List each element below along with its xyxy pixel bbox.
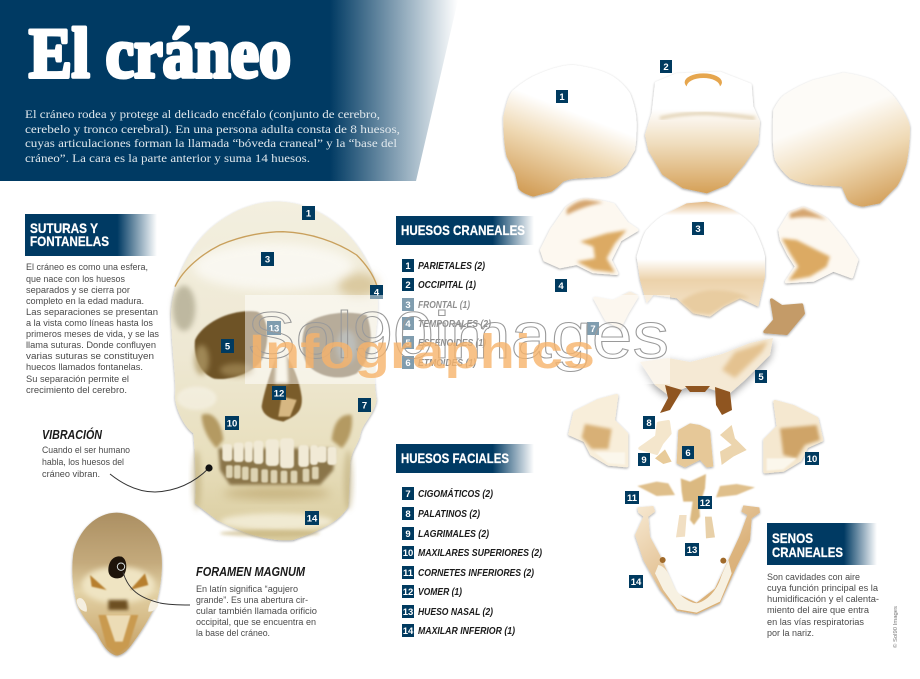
list craneales: TEMPORALES (2) (418, 319, 492, 330)
foramen magnum callout (123, 565, 317, 639)
list craneales: 3 (405, 300, 411, 311)
list faciales: PALATINOS (2) (418, 509, 481, 520)
header panel (0, 0, 458, 181)
vibración callout: habla, los huesos del (42, 457, 124, 468)
list faciales: LAGRIMALES (2) (418, 529, 490, 540)
suturas text: El cráneo es como una esfera, (26, 262, 148, 273)
foramen magnum callout: la base del cráneo. (196, 628, 270, 639)
number labels on bones: 2 (663, 62, 669, 73)
list craneales: FRONTAL (1) (418, 300, 471, 311)
list faciales: 9 (405, 529, 411, 540)
number labels on bones: 9 (641, 455, 647, 466)
number labels on bones (221, 60, 819, 588)
number labels on bones: 5 (758, 372, 764, 383)
intro text: cerebelo y tronco cerebral). En una persona adulta consta de 8 huesos, (25, 124, 400, 136)
number labels on bones: 13 (269, 324, 279, 334)
bone: lacrimal (640, 422, 672, 464)
intro text: El cráneo rodea y protege al delicado encéfalo (conjunto de cerebro, (25, 109, 380, 121)
senos text: humidificación y el calenta- (767, 594, 879, 605)
list craneales: ETMOIDES (1) (418, 358, 477, 369)
bone: sphenoid (640, 338, 773, 415)
bone: mandible (635, 505, 760, 614)
credit: © Sol90 Images (892, 606, 899, 648)
number labels on bones: 3 (695, 224, 701, 235)
list faciales: 11 (403, 568, 414, 579)
list craneales: 1 (405, 261, 411, 272)
bone: parietal left (503, 65, 637, 197)
suturas text: Las separaciones se presentan (26, 307, 158, 318)
list faciales: CIGOMÁTICOS (2) (418, 487, 494, 500)
list craneales: ESFENOIDES (1) (418, 338, 487, 349)
panel: suturas y fontanelas: SUTURAS Y (30, 220, 99, 236)
list faciales: 7 (405, 489, 411, 500)
suturas text: separados y se cierra por (26, 285, 131, 296)
number labels on bones: 8 (646, 418, 652, 429)
list craneales (402, 259, 492, 369)
list craneales: PARIETALES (2) (418, 261, 486, 272)
vibración callout: VIBRACIÓN (42, 427, 103, 442)
intro text: cuyas articulaciones forman la llamada “bóveda craneal” y la “base del (25, 138, 397, 150)
bone: cornete left (637, 482, 675, 496)
foramen magnum callout: FORAMEN MAGNUM (196, 565, 306, 579)
bone: frontal (637, 202, 765, 317)
bone: temporal left (542, 200, 637, 273)
list faciales: 10 (403, 548, 413, 559)
list craneales: 2 (405, 280, 411, 291)
title: El cráneo (29, 15, 291, 93)
bone: cornete right (716, 484, 755, 497)
bone: maxilla left (570, 396, 627, 466)
senos text: cuya función principal es la (767, 583, 879, 594)
suturas text: crecimiento del cerebro. (26, 385, 127, 396)
list faciales: 12 (403, 587, 413, 598)
skull bottom view (72, 513, 162, 656)
foramen magnum callout: cular también llamada orificio (196, 606, 317, 617)
list faciales: CORNETES INFERIORES (2) (418, 568, 535, 579)
senos text (767, 572, 879, 639)
panel: senos craneales (767, 523, 879, 639)
suturas text: que nace con los huesos (26, 274, 125, 285)
bone: small piece right (765, 300, 803, 333)
bone: nasal (676, 515, 715, 538)
senos text: en las vías respiratorias (767, 617, 864, 628)
list craneales: OCCIPITAL (1) (418, 280, 477, 291)
list faciales (402, 487, 543, 637)
panel: huesos craneales (396, 216, 534, 369)
number labels on bones: 5 (225, 342, 231, 352)
number labels on bones: 13 (687, 545, 697, 556)
panel: suturas y fontanelas (25, 214, 159, 396)
exploded cranial bones (503, 65, 910, 333)
list craneales: 4 (405, 319, 411, 330)
list faciales: VOMER (1) (418, 587, 463, 598)
list faciales: MAXILAR INFERIOR (1) (418, 626, 516, 637)
number labels on bones: 7 (590, 324, 596, 335)
panel: suturas y fontanelas: FONTANELAS (30, 233, 109, 249)
teeth (218, 438, 337, 485)
eye sockets (194, 311, 371, 379)
senos text: miento del aire que entra (767, 605, 870, 616)
number labels on bones: 10 (227, 418, 237, 430)
chin shading (220, 487, 333, 537)
list faciales: MAXILARES SUPERIORES (2) (418, 548, 543, 559)
number labels on bones: 12 (274, 388, 284, 400)
senos text: Son cavidades con aire (767, 572, 860, 583)
bone: parietal right (773, 73, 910, 207)
foramen magnum callout: grande”. Es una abertura cir- (196, 595, 308, 606)
facial bones group (570, 396, 822, 614)
number labels on bones: 10 (807, 454, 817, 465)
panel: senos craneales: SENOS (772, 530, 813, 546)
intro text (25, 109, 400, 165)
panel: huesos craneales: HUESOS CRANEALES (401, 222, 525, 238)
suturas text: varias suturas se constituyen (26, 351, 154, 362)
list craneales: 5 (405, 338, 411, 349)
suturas text: primeros meses de vida, y se las (26, 329, 159, 340)
suturas text: Su separación permite el (26, 374, 129, 385)
number labels on bones: 1 (306, 208, 312, 220)
bone: vomer (681, 474, 706, 525)
list faciales: 14 (403, 626, 414, 637)
bone: maxilla right (765, 402, 822, 472)
cheek hollows (177, 387, 352, 448)
suturas text: completo en la edad madura. (26, 296, 144, 307)
list faciales: HUESO NASAL (2) (418, 607, 494, 618)
number labels on bones: 7 (362, 400, 367, 412)
panel: huesos faciales: HUESOS FACIALES (401, 450, 509, 466)
bone: small piece left (595, 293, 637, 327)
suturas text (26, 262, 159, 396)
senos text: por la nariz. (767, 628, 814, 639)
intro text: cráneo”. La cara es la parte anterior y suma 14 huesos. (25, 153, 310, 165)
vibración callout (42, 427, 213, 492)
number labels on bones: 3 (265, 254, 270, 266)
panel: senos craneales: CRANEALES (772, 544, 843, 560)
vibración callout: cráneo vibran. (42, 469, 100, 480)
watermark: Infographics (249, 326, 595, 379)
foramen magnum callout: En latín significa “agujero (196, 584, 298, 595)
foramen magnum callout: occipital, que se encuentra en (196, 617, 316, 628)
number labels on bones: 6 (685, 448, 691, 459)
list faciales: 13 (403, 607, 413, 618)
panel: huesos faciales (396, 444, 543, 637)
bone: right fragments (720, 425, 747, 465)
number labels on bones: 14 (631, 577, 642, 588)
bone: occipital (647, 73, 758, 192)
number labels on bones: 4 (374, 288, 380, 298)
vibración callout: Cuando el ser humano (42, 445, 130, 456)
bone: ethmoid (677, 423, 713, 467)
watermark: Sol90images (247, 298, 669, 372)
number labels on bones: 12 (700, 498, 710, 509)
suturas text: huecos llamados fontanelas. (26, 362, 143, 373)
suturas text: llama suturas. Donde confluyen (26, 340, 156, 351)
number labels on bones: 4 (558, 281, 564, 292)
list faciales: 8 (405, 509, 411, 520)
bone: temporal right (780, 208, 857, 282)
number labels on bones: 1 (559, 92, 565, 103)
main skull front view (171, 202, 378, 540)
list craneales: 6 (405, 358, 411, 369)
number labels on bones: 11 (627, 493, 638, 504)
suturas text: a la vista como líneas hasta los (26, 318, 153, 329)
number labels on bones: 14 (307, 514, 318, 524)
nasal cavity (262, 330, 302, 422)
